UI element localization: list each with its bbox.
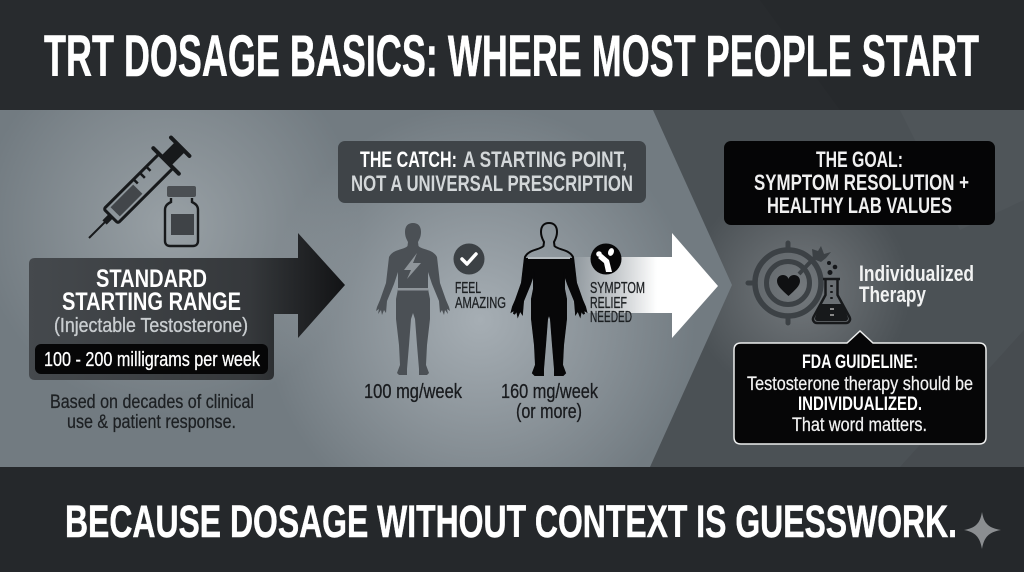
- label: feel amazing: FEEL: [455, 280, 481, 297]
- label: 160 mg/week or more: [501, 381, 599, 423]
- icon: sparkle: [964, 512, 1001, 549]
- label: symptom relief needed: RELIEF: [590, 295, 627, 312]
- label: symptom relief needed: SYMPTOM: [590, 280, 645, 297]
- text: based on decades: Based on decades of clinical: [50, 392, 254, 413]
- header band: [0, 0, 1024, 110]
- dose pill: 100 - 200 milligrams per week: [44, 349, 261, 371]
- heading: standard starting range: STARTING RANGE: [62, 288, 241, 316]
- heading box: the catch: NOT A UNIVERSAL PRESCRIPTION: [351, 171, 633, 196]
- callout: fda guideline: [734, 331, 986, 444]
- heading box: the catch: A STARTING POINT,: [463, 147, 627, 172]
- heading box: the catch: THE CATCH:: [360, 147, 457, 172]
- callout: fda guideline: INDIVIDUALIZED.: [798, 394, 922, 415]
- figure: 100 mg body with energy bolt: [376, 223, 450, 375]
- heading: standard starting range: [62, 265, 241, 316]
- label: symptom relief needed: [590, 280, 645, 326]
- icon: target with heart: [748, 243, 831, 323]
- heading box: the goal: THE GOAL:: [816, 147, 903, 172]
- icon: vial: [165, 186, 198, 246]
- footer band: [0, 467, 1024, 572]
- arrow: white fading arrow: [570, 233, 718, 338]
- label: individualized therapy: Individualized: [859, 261, 974, 286]
- panel: right dark faceted background: [640, 110, 1024, 467]
- callout: fda guideline: That word matters.: [792, 415, 927, 436]
- dose pill: [35, 344, 268, 374]
- label: symptom relief needed: NEEDED: [590, 309, 632, 326]
- arrow: standard starting range panel: [29, 233, 345, 380]
- label: feel amazing: [455, 280, 506, 312]
- heading box: the goal: HEALTHY LAB VALUES: [767, 193, 952, 218]
- icon: syringe: [76, 134, 193, 251]
- text: based on decades: [50, 392, 254, 433]
- icon: symptom circle: [590, 244, 622, 274]
- label: feel amazing: AMAZING: [455, 295, 506, 312]
- heading box: the goal: [724, 141, 995, 225]
- subheading: injectable testosterone: (Injectable Testosterone): [54, 315, 248, 337]
- heading: standard starting range: STANDARD: [96, 265, 207, 293]
- text: based on decades: use & patient response.: [67, 412, 236, 433]
- label: 160 mg/week or more: (or more): [516, 401, 582, 423]
- panel: light chevron background: [0, 110, 732, 467]
- icon: flask: [813, 261, 850, 323]
- figure: 160 mg body partly filled: [512, 223, 586, 375]
- callout: fda guideline: Testosterone therapy should be: [747, 374, 973, 395]
- label: individualized therapy: Therapy: [859, 282, 927, 307]
- heading box: the catch: [338, 141, 646, 203]
- callout: fda guideline: FDA GUIDELINE:: [802, 352, 918, 373]
- label: 100 mg/week: 100 mg/week: [364, 381, 463, 403]
- icon: check circle: [454, 244, 484, 274]
- label: 160 mg/week or more: 160 mg/week: [501, 381, 599, 403]
- label: individualized therapy: [859, 261, 974, 307]
